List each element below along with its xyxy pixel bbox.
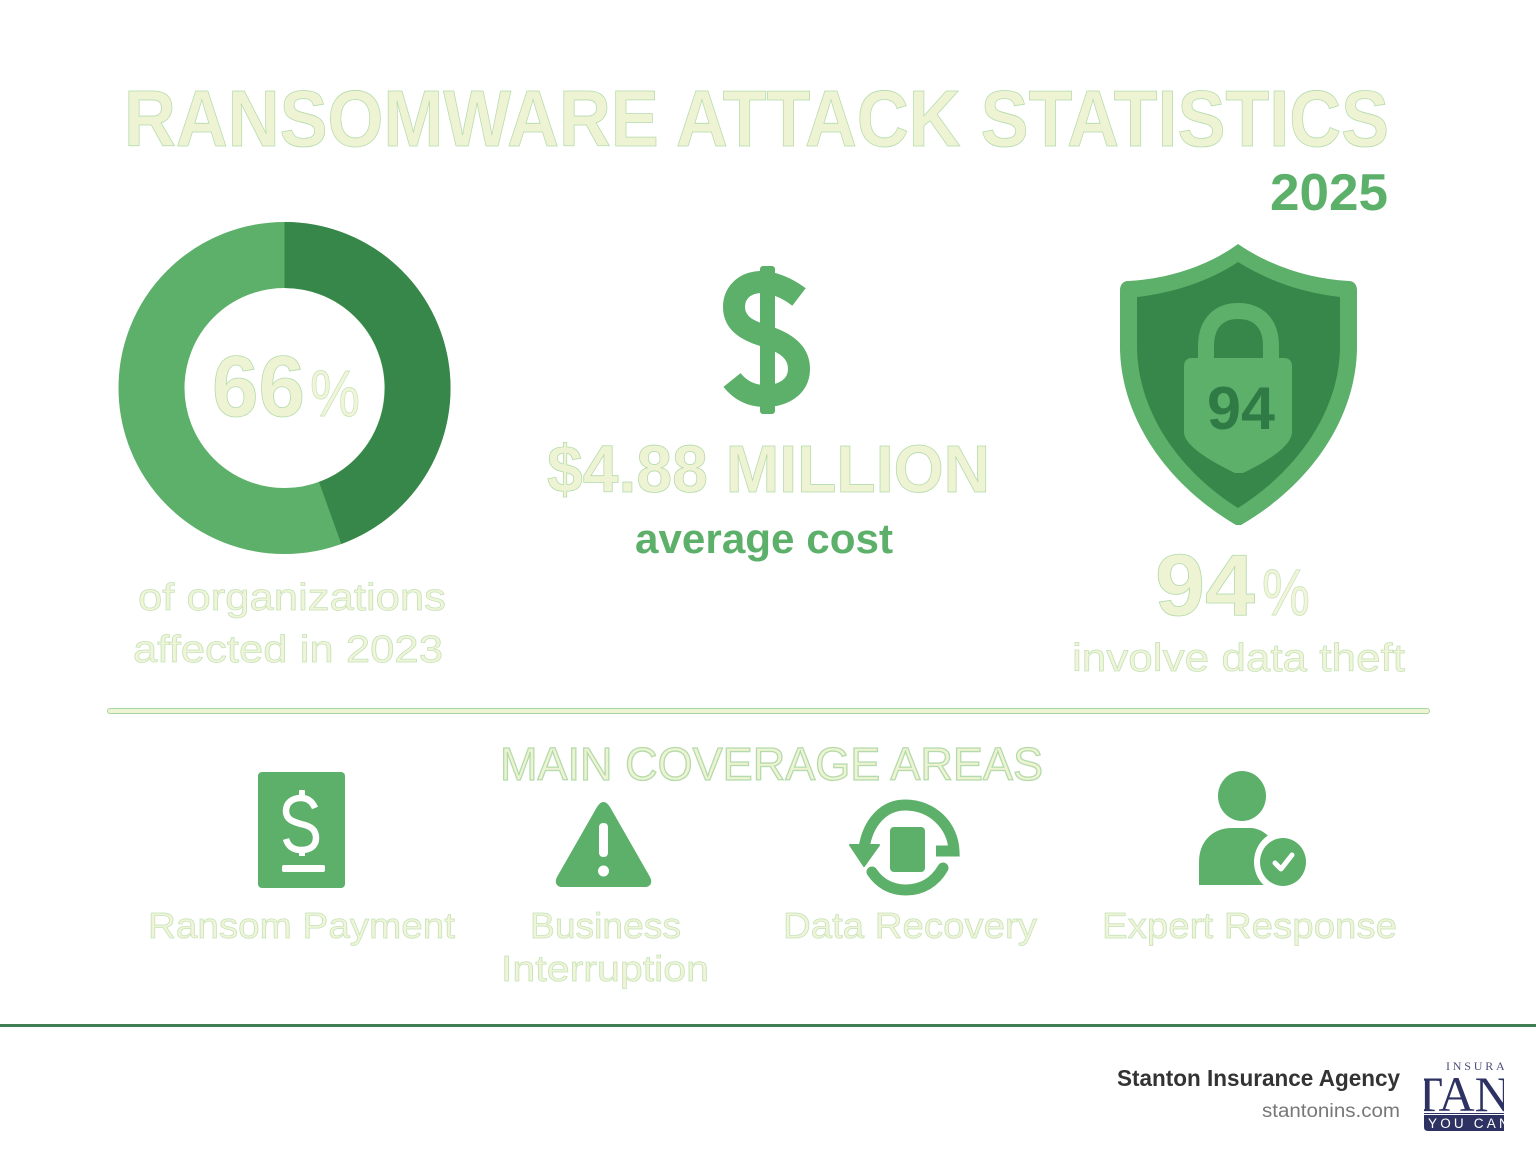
donut value: % — [310, 356, 360, 430]
year heading: 2025 — [1270, 164, 1388, 222]
icon: device with circular arrows — [850, 805, 954, 890]
panel: organizations affected — [133, 222, 451, 671]
label: Interruption — [501, 948, 709, 989]
panel: average cost — [547, 266, 990, 562]
title: RANSOMWARE ATTACK STATISTICS — [124, 74, 1389, 163]
panel: data theft — [1072, 244, 1405, 680]
agency name: Stanton Insurance Agency — [1117, 1065, 1400, 1091]
label: Data Recovery — [783, 905, 1037, 946]
data theft value — [1155, 537, 1310, 634]
coverage: ransom payment — [148, 772, 455, 946]
coverage: data recovery — [783, 805, 1037, 946]
label: Business — [530, 905, 681, 946]
icon: dollar card — [258, 772, 345, 888]
icon: person with check badge — [1199, 771, 1312, 893]
donut caption: affected in 2023 — [133, 629, 443, 671]
cost caption: average cost — [635, 515, 893, 562]
label: Ransom Payment — [148, 905, 455, 946]
coverage: expert response — [1102, 771, 1397, 946]
donut chart — [152, 222, 451, 544]
data theft value: 94 — [1155, 537, 1255, 634]
website: stantonins.com — [1262, 1101, 1400, 1122]
logo — [1424, 1062, 1504, 1131]
icon: shield with padlock: 94 — [1207, 375, 1276, 442]
logo: TAN — [1412, 1066, 1511, 1122]
donut value: 66 — [212, 339, 305, 435]
donut value — [212, 339, 360, 435]
coverage: business interruption — [501, 802, 709, 989]
data theft value: % — [1262, 555, 1310, 629]
cost value: $4.88 MILLION — [547, 432, 990, 507]
section heading: MAIN COVERAGE AREAS — [500, 738, 1043, 790]
icon: dollar sign — [732, 266, 799, 414]
data theft caption: involve data theft — [1072, 637, 1405, 680]
donut caption — [133, 577, 446, 671]
label: Expert Response — [1102, 905, 1397, 946]
footer brand — [1117, 1065, 1400, 1122]
logo: YOU CAN — [1428, 1116, 1512, 1131]
icon: warning triangle — [556, 802, 651, 887]
donut caption: of organizations — [138, 577, 446, 619]
icon: shield with padlock — [1120, 244, 1357, 525]
label — [501, 905, 709, 989]
